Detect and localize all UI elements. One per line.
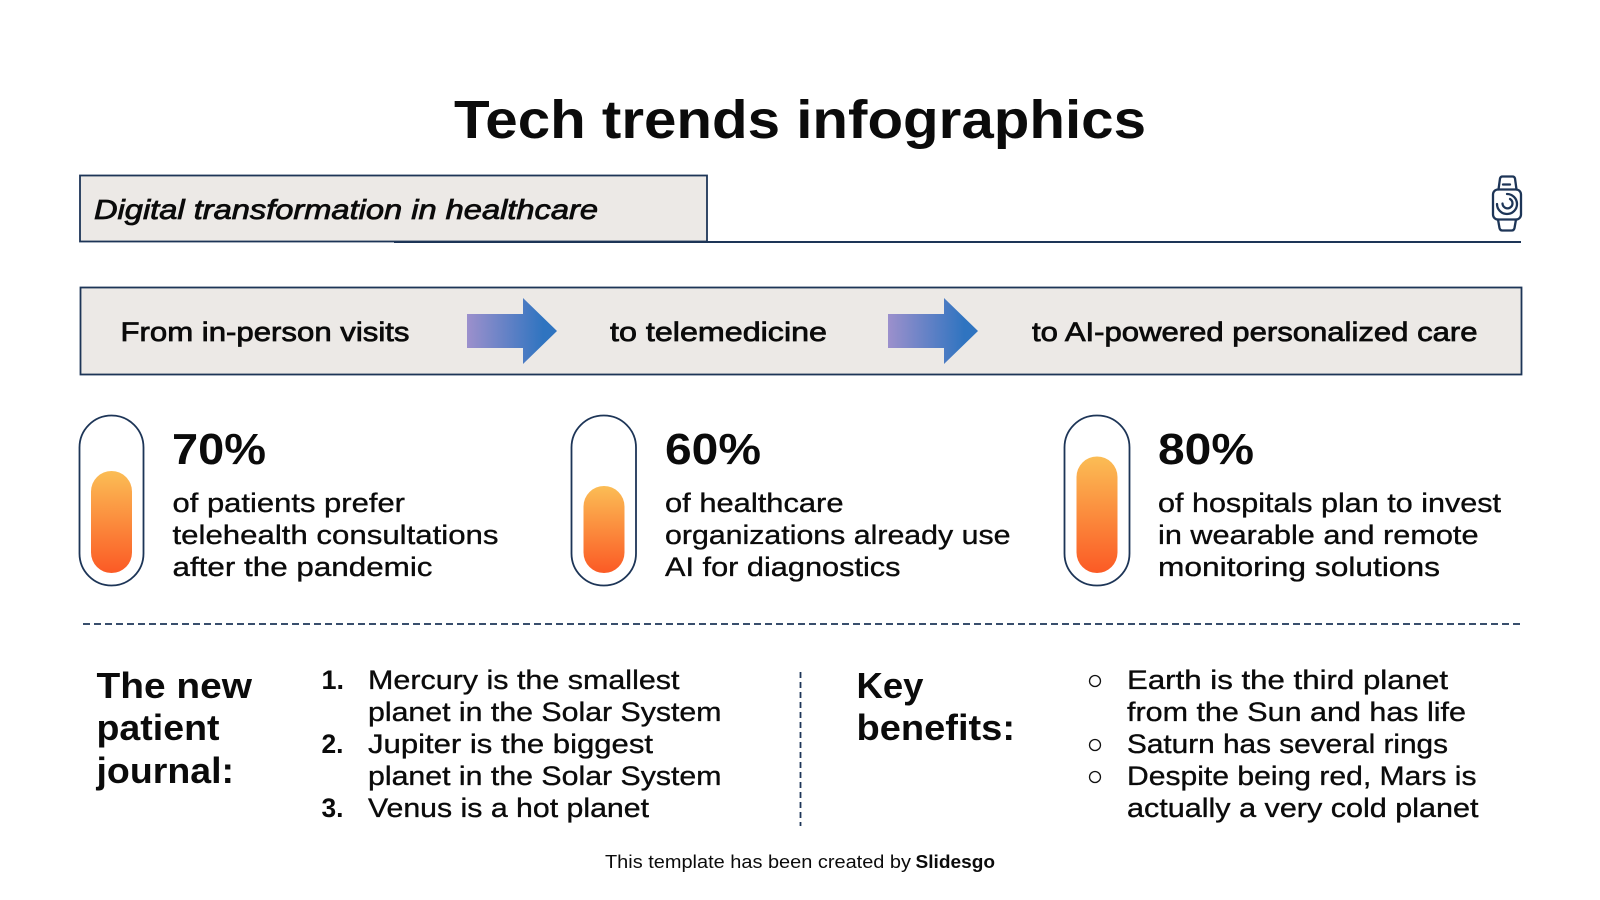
heading: key benefits: benefits: xyxy=(856,707,1015,748)
step: in-person visits: From in-person visits xyxy=(120,317,410,347)
numbered list: planet in the Solar System xyxy=(368,697,722,727)
title: Tech trends infographics xyxy=(454,90,1146,150)
stat: 70 percent xyxy=(80,416,498,586)
heading: patient journal: patient xyxy=(96,707,220,748)
stat: 80 percent: of hospitals plan to invest xyxy=(1158,488,1502,518)
arrow: to telemedicine xyxy=(467,298,557,364)
stat: 60 percent: 60% xyxy=(665,425,761,474)
heading: patient journal: journal: xyxy=(95,750,234,791)
stat: 60 percent: AI for diagnostics xyxy=(665,552,900,582)
stat: 60 percent: of healthcare xyxy=(665,488,844,518)
bulleted list: Saturn has several rings xyxy=(1127,729,1448,759)
panel: care evolution banner xyxy=(80,288,1522,374)
stat: 80 percent: in wearable and remote xyxy=(1158,520,1478,550)
footer credit: Slidesgo xyxy=(916,852,995,872)
numbered list: planet in the Solar System xyxy=(368,761,722,791)
step: AI-powered care: to AI-powered personalized care xyxy=(1032,317,1478,347)
stat: 70 percent: of patients prefer xyxy=(172,488,405,518)
heading: patient journal xyxy=(95,665,253,791)
stat: 70 percent: telehealth consultations xyxy=(172,520,498,550)
numbered list xyxy=(322,665,722,823)
bulleted list: Earth is the third planet xyxy=(1127,665,1449,695)
stat: 70 percent: after the pandemic xyxy=(172,552,432,582)
stat: 80 percent: monitoring solutions xyxy=(1158,552,1440,582)
bulleted list: actually a very cold planet xyxy=(1127,793,1479,823)
stat: 80 percent xyxy=(1064,416,1502,586)
icon: smartwatch xyxy=(1493,176,1521,230)
bulleted list: Despite being red, Mars is xyxy=(1127,761,1476,791)
numbered list: 2. xyxy=(322,729,344,759)
stat: 60 percent xyxy=(572,416,1010,586)
stat: 80 percent: 80% xyxy=(1158,425,1254,474)
stat: 70 percent: 70% xyxy=(172,425,266,474)
numbered list: Jupiter is the biggest xyxy=(368,729,654,759)
numbered list: Mercury is the smallest xyxy=(368,665,680,695)
numbered list: Venus is a hot planet xyxy=(368,793,650,823)
heading: key benefits xyxy=(856,665,1015,748)
heading: key benefits: Key xyxy=(856,665,924,706)
numbered list: 3. xyxy=(322,793,344,823)
section heading: digital transformation xyxy=(80,176,1521,242)
footer credit: This template has been created by xyxy=(605,852,911,872)
step: telemedicine: to telemedicine xyxy=(610,317,827,347)
heading: patient journal: The new xyxy=(96,665,253,706)
arrow: to AI care xyxy=(888,298,978,364)
stat: 60 percent: organizations already use xyxy=(665,520,1010,550)
numbered list: 1. xyxy=(322,665,344,695)
bulleted list: from the Sun and has life xyxy=(1127,697,1466,727)
section heading: digital transformation: Digital transformation in healthcare xyxy=(94,194,598,225)
bulleted list xyxy=(1090,665,1479,823)
